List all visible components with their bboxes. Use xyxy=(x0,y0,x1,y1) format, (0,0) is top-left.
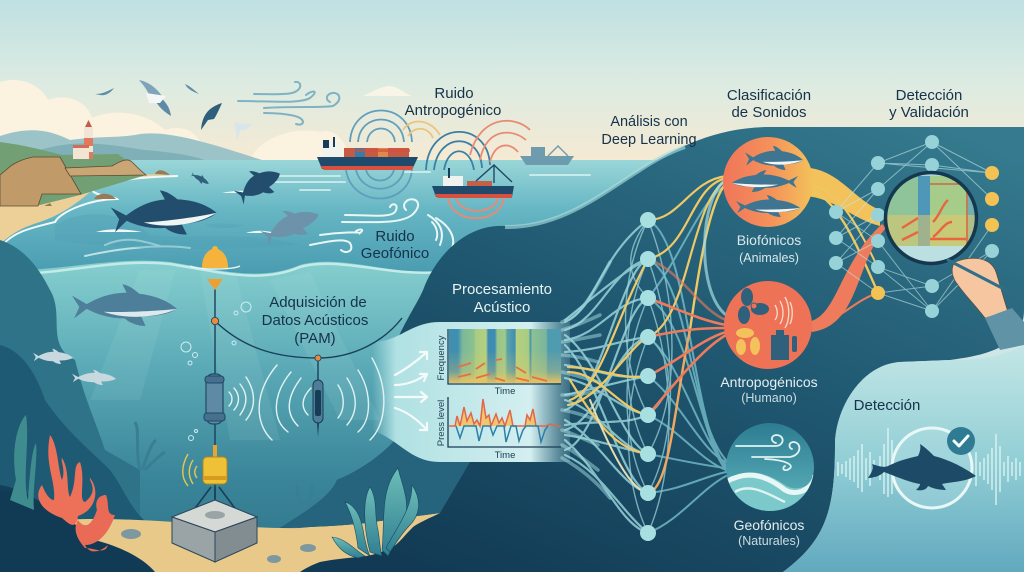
panel: acoustic processing xyxy=(372,322,570,462)
panel: detection xyxy=(838,427,1020,508)
underwater whale xyxy=(72,284,177,326)
bubbles xyxy=(181,302,251,440)
class circle: geophonic xyxy=(726,423,815,512)
small fish xyxy=(33,349,116,385)
surface whales and dolphins xyxy=(96,158,324,251)
heading: acoustic data acquisition: Datos Acústicos xyxy=(262,312,368,329)
seabirds xyxy=(95,80,252,141)
hydrophone node xyxy=(315,355,321,361)
cliffs and beach xyxy=(0,142,178,248)
time axis label: Time xyxy=(495,386,515,397)
water surface line xyxy=(0,263,440,276)
mooring cable and hydrophone line xyxy=(215,285,402,500)
icon: yellow sensor xyxy=(203,445,227,484)
icon: whale silhouette xyxy=(868,444,976,490)
network links xyxy=(836,142,992,311)
heading: acoustic processing: Procesamiento xyxy=(452,281,552,298)
heading: detection and validation: y Validación xyxy=(889,104,969,121)
big dark network panel xyxy=(280,127,1024,572)
pressure level chart xyxy=(448,397,561,447)
tripod legs xyxy=(190,487,240,515)
validation network xyxy=(829,135,999,318)
white data arrows xyxy=(395,352,427,430)
connector node xyxy=(211,317,219,325)
heading: detection: Detección xyxy=(854,397,920,414)
pressure axis label: Press level xyxy=(436,400,447,446)
icon: container ship xyxy=(317,137,418,170)
detection panel background xyxy=(783,345,1024,572)
frequency axis label: Frequency xyxy=(436,335,447,380)
panel edge highlight xyxy=(505,147,685,227)
icon: recording instrument xyxy=(204,374,225,424)
icon: magnifying glass with spectrogram xyxy=(886,172,978,266)
sand seabed xyxy=(60,510,460,572)
heading: detection and validation: Detección xyxy=(896,87,962,104)
icon: hand holding pen xyxy=(948,258,1024,350)
heading: acoustic data acquisition: Adquisición de xyxy=(269,294,367,311)
icon: distant ship xyxy=(520,146,574,165)
heading: acoustic processing: Acústico xyxy=(474,299,530,316)
icon: fishing boat xyxy=(432,165,514,198)
label: anthropogenic: Antropogénicos xyxy=(720,374,818,390)
icon: lighthouse xyxy=(73,120,93,159)
heading: sound classification: de Sonidos xyxy=(731,104,807,121)
sea surface xyxy=(0,160,1024,285)
heading: deep learning analysis: Deep Learning xyxy=(601,132,697,148)
seabed rocks left xyxy=(0,240,150,572)
geophonic wind lines xyxy=(310,199,453,252)
class circle: anthropogenic xyxy=(724,224,886,369)
heading: geophonic noise: Geofónico xyxy=(361,245,429,262)
neural network connections left xyxy=(562,176,727,533)
heading: deep learning analysis: Análisis con xyxy=(610,114,688,130)
right seaweed xyxy=(332,468,419,558)
heading: geophonic noise: Ruido xyxy=(375,228,415,245)
darker water patches xyxy=(55,214,300,249)
waveform xyxy=(838,428,1020,505)
spectrogram chart xyxy=(448,329,561,384)
background algae silhouette xyxy=(135,422,319,510)
detection ring xyxy=(892,428,972,508)
sound rings around ships xyxy=(346,110,530,218)
label: anthropogenic: (Humano) xyxy=(741,391,797,405)
icon: hydrophone xyxy=(313,380,323,437)
wave highlights xyxy=(85,172,590,256)
icon: concrete block xyxy=(172,500,257,562)
sound waves around instruments xyxy=(229,358,384,440)
heading: anthropogenic noise: Antropogénico xyxy=(405,102,501,119)
sky background xyxy=(0,0,1024,165)
label: geophonic: (Naturales) xyxy=(738,534,800,548)
light rays xyxy=(90,270,380,440)
foreground dark rock xyxy=(0,490,155,572)
icon: check badge xyxy=(947,427,975,455)
coral and seaweed left xyxy=(10,415,115,551)
network nodes xyxy=(829,135,999,318)
wind lines xyxy=(238,82,339,125)
underwater background xyxy=(0,261,440,572)
distant hills xyxy=(0,130,262,170)
heading: sound classification: Clasificación xyxy=(727,87,811,104)
submerged rock patch xyxy=(280,440,470,528)
icon: surface buoy xyxy=(190,246,240,290)
neural network nodes left xyxy=(640,212,656,541)
label: geophonic: Geofónicos xyxy=(734,517,804,533)
label: biophonic: (Animales) xyxy=(739,251,799,265)
small rocks on seabed xyxy=(121,529,316,563)
label: biophonic: Biofónicos xyxy=(737,232,801,248)
heading: anthropogenic noise: Ruido xyxy=(434,85,474,102)
class circle: biophonic xyxy=(723,137,880,293)
clouds xyxy=(0,80,412,160)
output nodes xyxy=(871,166,999,300)
sound waves on yellow sensor xyxy=(183,454,197,486)
time axis label: Time xyxy=(495,450,515,461)
heading: acoustic data acquisition: (PAM) xyxy=(294,330,336,347)
